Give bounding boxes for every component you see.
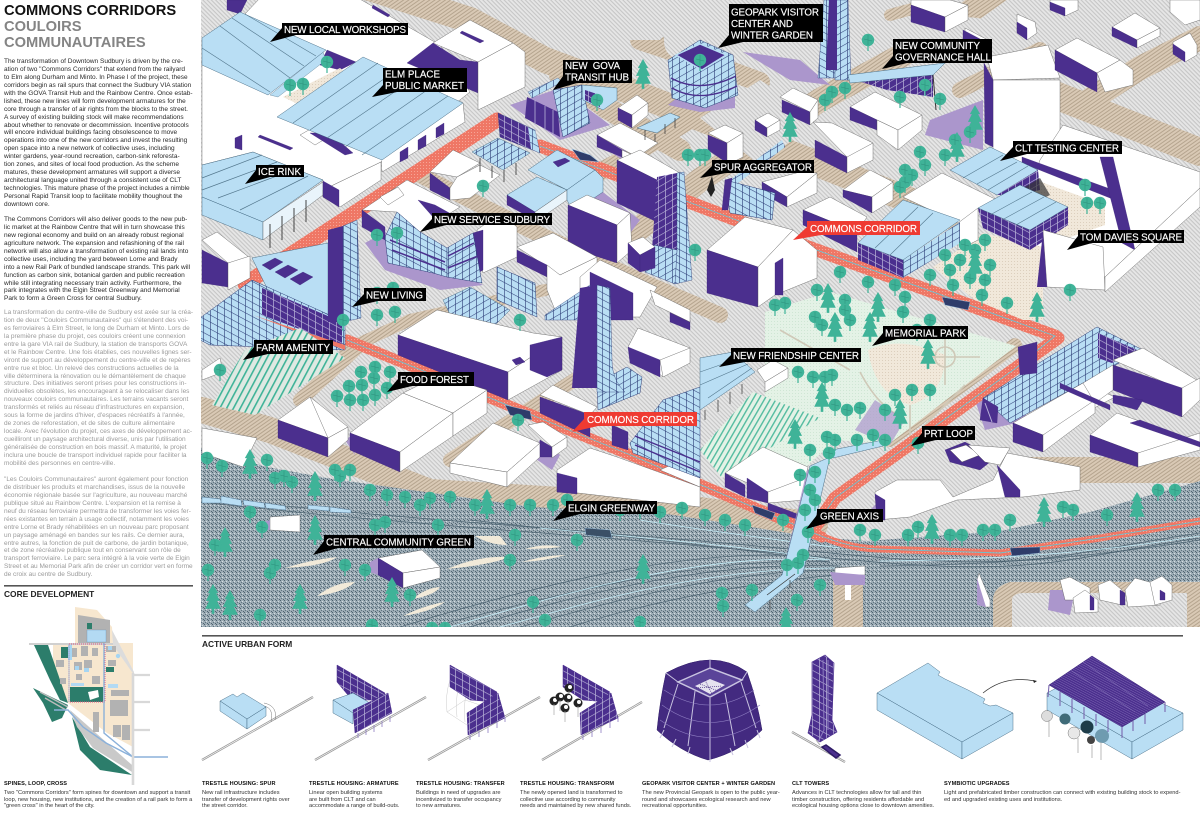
road network [202, 0, 1200, 525]
text block: French introduction: tion de deux "Couloirs Communautaires" qui s'étendent des voi- [4, 317, 188, 324]
caption: trestle housing armature: Linear open building systems [309, 790, 382, 796]
panel: isometric map of downtown Sudbury [200, 0, 1200, 639]
workshops and market white mass [202, 0, 470, 190]
caption: CLT towers: timber construction, offering residents affordable and [792, 796, 924, 802]
small block beside transit hub [597, 95, 658, 165]
north-east houses [1055, 0, 1200, 92]
text block: English introduction: open space into a new network of collective uses, including [4, 145, 175, 152]
caption: geopark visitor center: The new Provincial Geopark is open to the public year- [642, 790, 780, 796]
label: Farm Amenity [243, 340, 333, 360]
text block: French goods and rail park: publique situé au Rainbow Centre. L'expansion et la remise à [4, 500, 181, 507]
text block: English introduction: operations into one of the new corridors and invest the resulting [4, 137, 187, 144]
label: New Friendship Center: NEW FRIENDSHIP CENTER [733, 351, 859, 362]
diagram: trestle housing spur [202, 693, 313, 760]
text block: French introduction [4, 309, 193, 467]
New Service Sudbury white masses [362, 180, 517, 273]
text block: French goods and rail park [4, 476, 193, 578]
text block: French goods and rail park: "Les Couloirs Communautaires" auront également pour fonction [4, 476, 188, 483]
caption: trestle housing spur: TRESTLE HOUSING: SPUR [202, 781, 276, 787]
caption: spines, loop, cross: loop, new housing, new institutions, and the creation of a rail park to form a [4, 796, 192, 802]
north building row [911, 0, 1078, 62]
text block: English introduction: winter gardens, year-round recreation, carbon-sink reforesta- [4, 153, 180, 160]
label: Elm Place Public Market: ELM PLACE [385, 70, 440, 80]
tall white slab [984, 45, 1060, 180]
Tom Davies Square white roof [1000, 125, 1200, 277]
label: Food Forest: FOOD FOREST [400, 375, 469, 386]
south-east cottages [1048, 576, 1172, 615]
second central block cluster [762, 170, 893, 252]
caption: spines, loop, cross: "green cross" in the heart of the city. [4, 803, 95, 809]
caption: geopark visitor center: recreational opportunities. [642, 803, 707, 809]
caption: trestle housing transform: TRESTLE HOUSING: TRANSFORM [520, 781, 614, 787]
label: New Community Governance Hall [882, 39, 992, 69]
rail yard tracks [201, 497, 1200, 627]
title: COULOIRS [4, 19, 82, 35]
trees: Memorial Park [769, 266, 936, 486]
label: New Gova Transit Hub [553, 60, 632, 90]
Geopark tall tower [818, 0, 851, 80]
heading: active urban form: ACTIVE URBAN FORM [202, 639, 292, 649]
diagram: existing building massing [877, 663, 1013, 759]
passenger train in yard [202, 496, 351, 513]
row building along south Durham [398, 310, 562, 400]
big block under spur [707, 217, 817, 307]
text block: English goods and rail park: into a new Rail Park of bundled landscape strands. This park will [4, 264, 190, 271]
text block: English goods and rail park: network will also allow a transformation of existing rail lands into [4, 248, 188, 255]
text block: French goods and rail park: un paysage aménagé en bandes sur les rails. Ce dernier aura, [4, 532, 184, 539]
CLT Testing Center [950, 147, 1050, 200]
text block: English goods and rail park: while still integrating necessary train activity. Furthermore, the [4, 280, 182, 286]
label: Geopark Visitor Center and Winter Garden: GEOPARK VISITOR [731, 8, 819, 18]
Geopark visitor centre dome [668, 40, 738, 108]
caption: trestle housing transform: The newly opened land is transformed to [520, 790, 622, 796]
text block: French introduction: inclura une boucle de transport individuel rapide pour faciliter la [4, 452, 187, 459]
caption: trestle housing armature: are built from CLT and can [309, 796, 376, 802]
caption: trestle housing spur: New rail infrastructure includes [202, 790, 280, 796]
label: Commons Corridor upper: COMMONS CORRIDOR [810, 224, 917, 235]
label: Geopark Visitor Center and Winter Garden [718, 4, 823, 48]
trees: yard north edge [201, 449, 688, 523]
text block: French goods and rail park: économie régionale basée sur l'agriculture, au nouveau marché [4, 492, 187, 499]
diagram: trestle housing armature [315, 665, 426, 760]
blue canopy south of Service Sudbury [440, 287, 510, 325]
text block: French introduction: La transformation du centre-ville de Sudbury est axée sur la créa- [4, 309, 193, 316]
caption: trestle housing armature: TRESTLE HOUSING: ARMATURE [309, 781, 399, 787]
caption: trestle housing transform [520, 781, 631, 809]
rail yard objects [830, 566, 990, 607]
plan diagram: core development [29, 607, 168, 785]
text block: English goods and rail park: agriculture network. The expansion and refashioning of the rail [4, 240, 184, 247]
text block: French goods and rail park: de croix au centre de Sudbury. [4, 571, 92, 578]
food forest parcel [330, 367, 403, 412]
text block: English introduction: ation of two "Commons Corridors" that extend from the railyard [4, 66, 185, 73]
label: New Gova Transit Hub: TRANSIT HUB [565, 72, 629, 84]
tower by Minto [617, 150, 692, 284]
caption: trestle housing transfer [416, 781, 505, 809]
text block: English introduction: Personal Rapid Transit loop to facilitate mobility thoughout the [4, 193, 183, 200]
text block: French goods and rail park: entre Lorne et Brady réhabilitées en un nouveau parc proposant [4, 524, 189, 531]
caption: geopark visitor center [642, 781, 780, 809]
caption: trestle housing transfer: to new armatures. [416, 803, 461, 809]
divider: active urban form [202, 635, 1183, 637]
text block: French introduction: ville déterminera la rénovation ou le démantèlement de chaque [4, 372, 186, 380]
small stepped blue tower pair [544, 284, 590, 320]
white block between CLT roofs [903, 173, 997, 250]
label: New Local Workshops [270, 23, 408, 42]
diagram: trestle housing transform [542, 665, 642, 760]
label: Geopark Visitor Center and Winter Garden: WINTER GARDEN [731, 30, 813, 42]
label: Green Axis: GREEN AXIS [820, 512, 879, 522]
west Durham armature with tower [200, 220, 361, 350]
label: New Living [352, 288, 426, 307]
plaza under Tom Davies [933, 233, 1043, 320]
text block: English introduction: downtown core. [4, 201, 50, 208]
spur aggregator armature [707, 140, 785, 220]
blue canopy and white house at Durham [430, 138, 530, 200]
text block: French introduction: viront de support au développement du centre-ville et de repères [4, 357, 191, 364]
text block: English goods and rail park: collective uses, including the yard between Lorne and Brady [4, 256, 178, 263]
white block row at Elgin west [202, 428, 257, 467]
Community Governance Hall [848, 63, 945, 110]
caption: trestle housing armature: accommodate a range of build-outs. [309, 803, 400, 809]
label: Ice Rink [245, 165, 304, 184]
label: PRT Loop [911, 426, 975, 446]
caption: geopark visitor center: round and showcases ecological research and new [642, 796, 771, 802]
label: Memorial Park [872, 326, 968, 346]
label: New Service Sudbury [420, 213, 552, 232]
caption: CLT towers: ecological housing options close to downtown amenities. [792, 803, 934, 809]
label: Commons Corridor lower: COMMONS CORRIDOR [587, 415, 694, 426]
text block: English introduction: about whether to renovate or decommission. Incentive protocols [4, 122, 189, 128]
rail yard ground [201, 448, 1200, 627]
text block: English introduction: to Elm along Durham and Minto. In Phase I of the project, these [4, 74, 188, 81]
Green Axis bridge [745, 440, 883, 612]
label: Tom Davies Square [1067, 230, 1184, 250]
blue canopy near transit hub [637, 113, 680, 142]
east block group [1013, 348, 1200, 467]
text block: English introduction: will encore individual buildings facing obsolescence to move [4, 129, 177, 136]
text block: French introduction: sous la forme de jardins d'hiver, d'espaces récréatifs à l'année, [4, 412, 185, 419]
Central Community Green building [370, 550, 440, 588]
label: Elm Place Public Market [372, 68, 467, 97]
small building in rail yard west [264, 515, 300, 532]
Rainbow armature [612, 387, 700, 478]
label: New Community Governance Hall: NEW COMMUNITY [895, 41, 980, 52]
south-west warehouse [350, 375, 487, 472]
south block row near Rainbow [557, 448, 700, 507]
text block: French goods and rail park: Street et au Memorial Park afin de créer un corridor vert en forme [4, 563, 193, 570]
text block: French introduction: entre rue et bloc. Un relevé des constructions actuelles de la [4, 365, 179, 372]
caption: CLT towers: CLT TOWERS [792, 781, 829, 787]
text block: French introduction: entre la gare VIA rail de Sudbury, la station de transports GOVA [4, 341, 187, 348]
text block: French goods and rail park: transport ferroviaire. Le parc sera intégré à la voie verte de Elgin [4, 555, 190, 562]
caption: symbiotic upgrades: Light and prefabricated timber construction can connect with existing building stock to expend- [944, 790, 1180, 796]
label: Spur Aggregator [700, 160, 814, 178]
caption: trestle housing transfer: Buildings in need of upgrades are [416, 790, 501, 796]
text block: French introduction: mobilité des personnes en centre-ville. [4, 460, 115, 467]
trees: food forest and farm [214, 282, 524, 431]
text block: French goods and rail park: rées existantes en terrain à usage collectif, notamment les voies [4, 516, 189, 523]
trees: rail yard [202, 506, 651, 639]
tall white building at Elm [407, 20, 525, 110]
text block: French introduction: locale. Avec l'évolution du projet, ces axes de développement ac- [4, 428, 192, 435]
map ground [201, 0, 1200, 541]
title [4, 3, 176, 51]
label: Commons Corridor upper [793, 221, 920, 240]
beige landscape strands [285, 536, 566, 616]
text block: French goods and rail park: et de zone récréative publique tout en conservant son rôle de [4, 547, 181, 554]
label: CLT Testing Center [1000, 141, 1122, 161]
caption: trestle housing transfer: incentivized to transfer occupancy [416, 796, 501, 802]
caption: trestle housing spur [202, 781, 290, 809]
arrow: upgrade transition [983, 680, 1037, 693]
text block: French introduction: dividuelles obsolètes, les encourageant à se relocaliser dans les [4, 388, 189, 395]
caption: trestle housing transform: collective use according to community [520, 796, 616, 802]
text block: French goods and rail park: entre autres, la fonction de puit de carbone, de jardin botanique, [4, 540, 189, 546]
text block: French introduction: de zones de reforestation, et de sites de culture alimentaire [4, 420, 175, 427]
text block: English introduction: with the GOVA Transit Hub and the Rainbow Centre. Once estab- [4, 90, 193, 97]
south park blocks [725, 447, 808, 520]
east armature with tower [980, 327, 1143, 423]
label: Ice Rink: ICE RINK [258, 167, 301, 178]
diagram: geopark visitor centre [657, 660, 762, 762]
caption: symbiotic upgrades: ed and upgraded existing uses and institutions. [944, 796, 1062, 802]
south-east parcel [833, 577, 1200, 627]
label: Green Axis [806, 509, 883, 529]
diagram: symbiotic upgrade [1042, 656, 1183, 760]
label: Spur Aggregator: SPUR AGGREGATOR [714, 162, 812, 174]
label: Geopark Visitor Center and Winter Garden: CENTER AND [731, 19, 793, 30]
text block: French introduction: cueilliront un paysage architectural diverse, unis par l'utilisation [4, 436, 186, 443]
text block: English introduction [4, 58, 193, 208]
Tom Davies tower block [1037, 188, 1200, 292]
light purple ground shadows [346, 52, 1026, 509]
label: Memorial Park: MEMORIAL PARK [885, 328, 966, 340]
Elm Place Public Market [277, 57, 465, 172]
heading: core development: CORE DEVELOPMENT [4, 589, 94, 599]
block row mid Durham [517, 233, 657, 320]
canopy east of Commons label [858, 200, 960, 278]
large purple-faced block [568, 195, 655, 272]
text block: French introduction: es ferroviaires à Elm Street, le long de Durham et Minto. Lors de [4, 325, 190, 332]
Durham south block [450, 422, 567, 487]
rounded grey parcels [630, 17, 980, 159]
trees: yard east [699, 437, 1181, 637]
label: New Gova Transit Hub: NEW GOVA [565, 61, 620, 72]
text block: English introduction: The transformation of Downtown Sudbury is driven by the cre- [4, 58, 183, 65]
New Local Workshops roof [202, 12, 356, 105]
text block: English introduction: A survey of existing building stock will make recommendations [4, 114, 184, 121]
caption: trestle housing spur: the street corridor. [202, 803, 248, 809]
Memorial Park lawn [765, 292, 1016, 470]
caption: symbiotic upgrades [944, 781, 1180, 802]
title: COMMONS CORRIDORS [4, 3, 176, 19]
blue roof block [506, 150, 604, 213]
text block: English introduction: core through a transfer of air rights from the blocks to the street. [4, 106, 188, 113]
label: New Community Governance Hall: GOVERNANCE HALL [895, 52, 992, 64]
label: Central Community Green: CENTRAL COMMUNITY GREEN [326, 538, 471, 548]
white block west edge [202, 232, 250, 290]
PRT train one [572, 149, 599, 162]
caption: trestle housing transfer: TRESTLE HOUSING: TRANSFER [416, 781, 505, 787]
text block: French introduction: la première phase du projet, ces couloirs créent une connexion [4, 333, 185, 340]
diagram: CLT tower [792, 655, 845, 762]
text block: English goods and rail park: Park to form a Green Cross for central Sudbury. [4, 295, 142, 302]
text block: French introduction: nouveaux couloirs communautaires. Les terrains vacants seront [4, 396, 188, 403]
caption: geopark visitor center: GEOPARK VISITOR CENTER + WINTER GARDEN [642, 781, 775, 787]
New Friendship Center canopy [700, 352, 788, 420]
PRT train two and three [505, 297, 1040, 556]
text block: English goods and rail park [4, 216, 190, 302]
caption: symbiotic upgrades: SYMBIOTIC UPGRADES [944, 781, 1010, 787]
label: New Local Workshops: NEW LOCAL WORKSHOPS [284, 25, 406, 36]
small armature wall [497, 267, 537, 317]
text block: French introduction: structure. Des initiatives seront prises pour les constructions in- [4, 380, 187, 387]
text block: English introduction: lished, these new lines will form development armatures for the [4, 98, 186, 105]
caption: spines, loop, cross: SPINES, LOOP, CROSS [4, 781, 67, 787]
text block: English goods and rail park: The Commons Corridors will also deliver goods to the new pub- [4, 216, 187, 223]
urban farm field in the park [700, 392, 820, 478]
text block: French goods and rail park: de distribuer les produits et marchandises, issus de la nouvelle [4, 484, 185, 491]
label: Commons Corridor lower [572, 412, 697, 432]
central block cluster [708, 88, 922, 173]
trees: civic plaza [924, 234, 1076, 322]
text block: French introduction: généralisée de construction en bois massif. A maturité, le projet [4, 444, 187, 451]
label: Elgin Greenway [553, 501, 657, 521]
label: New Friendship Center [719, 348, 861, 367]
Ice Rink [202, 152, 381, 248]
Minto south block and tower [540, 285, 642, 437]
caption: trestle housing transform: needs and maintained by new shared funds. [520, 803, 631, 809]
caption: CLT towers [792, 781, 934, 809]
label: New Living: NEW LIVING [366, 290, 423, 302]
PRT loop track [347, 146, 1200, 553]
label: Tom Davies Square: TOM DAVIES SQUARE [1080, 232, 1182, 244]
text block: English goods and rail park: park integrates with the Elgin Street Greenway and Memorial [4, 287, 180, 294]
label: New Service Sudbury: NEW SERVICE SUDBURY [434, 215, 550, 226]
text block: English goods and rail park: lic market at the Rainbow Centre that will in turn showcase this [4, 224, 185, 231]
text block: English introduction: technologies. This mature phase of the project includes a nimble [4, 185, 190, 192]
label: Central Community Green [313, 535, 474, 555]
text block: English goods and rail park: new regional economy and build on an already robust regional [4, 232, 184, 239]
New Service Sudbury curved armature [385, 212, 482, 283]
south-west house [278, 397, 348, 457]
label: Elm Place Public Market: PUBLIC MARKET [385, 81, 464, 92]
Commons Corridor red bands [245, 120, 1200, 553]
New Gova Transit Hub [525, 78, 617, 137]
bottom corridor train [585, 528, 612, 538]
label: CLT Testing Center: CLT TESTING CENTER [1015, 144, 1119, 154]
text block: French introduction: et le Rainbow Centre. Une fois établies, ces nouvelles lignes ser- [4, 349, 192, 356]
text block: French goods and rail park: neuf du réseau ferroviaire permettra de transformer les voies fer- [4, 508, 191, 515]
CLT second roof [978, 185, 1068, 250]
caption: trestle housing armature [309, 781, 400, 809]
armature wall spur [498, 113, 540, 153]
title: COMMUNAUTAIRES [4, 35, 146, 51]
Prt Loop building row [875, 442, 1080, 520]
caption: spines, loop, cross: Two "Commons Corridors" form spines for downtown and support a transit [4, 790, 190, 796]
CLT plaza ground [1030, 178, 1105, 240]
caption: trestle housing spur: transfer of development rights over [202, 796, 290, 802]
divider: core development [4, 585, 193, 587]
caption: spines, loop, cross [4, 781, 192, 809]
label: PRT Loop: PRT LOOP [924, 429, 973, 440]
diagram: trestle housing transfer [428, 665, 540, 760]
label: Food Forest [387, 372, 474, 392]
text block: English introduction: matures, these development armatures will support a diverse [4, 169, 180, 176]
trees: north [284, 34, 1106, 331]
label: Elgin Greenway: ELGIN GREENWAY [568, 504, 655, 514]
text block: English introduction: corridors begin as rail spurs that connect the Sudbury VIA station [4, 82, 191, 89]
farm amenity field [202, 328, 345, 415]
text block: English goods and rail park: function as carbon sink, botanical garden and public recreation [4, 272, 185, 279]
text block: English introduction: architectural language united through a consistent use of CLT [4, 177, 181, 184]
label: Farm Amenity: FARM AMENITY [256, 343, 330, 354]
text block: French introduction: transformés et reliés au réseau d'infrastructures en expansion, [4, 404, 184, 411]
Memorial Park plaza and paths [780, 330, 980, 445]
house cluster Minto [628, 290, 690, 377]
caption: CLT towers: Advances in CLT technologies allow for tall and thin [792, 790, 921, 796]
text block: English introduction: tion zones, and sites of local food production. As the scheme [4, 161, 179, 168]
